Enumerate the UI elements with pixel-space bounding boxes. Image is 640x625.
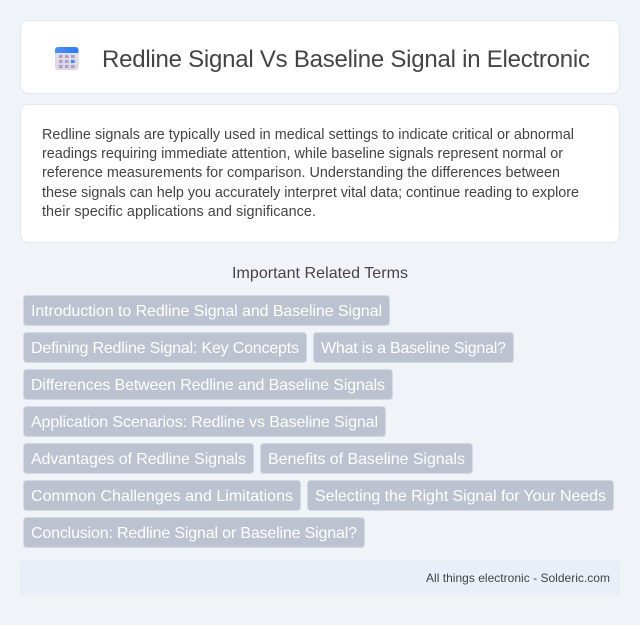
tag: [24, 296, 390, 326]
tag: [308, 480, 614, 510]
tag: [24, 406, 386, 436]
intro text: these signals can help you accurately interpret vital data; continue reading to explore: [42, 185, 579, 201]
tag: [24, 370, 392, 400]
intro text: readings requiring immediate attention, while baseline signals represent normal or: [42, 146, 563, 162]
tag: [24, 332, 306, 362]
intro text: Redline signals are typically used in medical settings to indicate critical or abnormal: [42, 127, 574, 143]
tag: Introduction to Redline Signal and Baseline Signal: [31, 303, 382, 320]
tag: [260, 444, 472, 474]
title: Redline Signal Vs Baseline Signal in Electronic: [102, 46, 590, 73]
panel: intro description: [20, 104, 620, 242]
tag: Selecting the Right Signal for Your Needs: [315, 488, 606, 505]
tag: [314, 332, 514, 362]
tag: [24, 480, 300, 510]
icon: calendar: [55, 47, 78, 70]
tag: Common Challenges and Limitations: [31, 488, 293, 505]
tag: Differences Between Redline and Baseline Signals: [31, 377, 385, 394]
intro text: their specific applications and significance.: [42, 204, 316, 220]
tag: Application Scenarios: Redline vs Baseline Signal: [31, 414, 378, 431]
footer bar: [20, 561, 620, 595]
tag list: [24, 296, 614, 548]
tag: Advantages of Redline Signals: [31, 451, 246, 468]
intro text: reference measurements for comparison. Understanding the differences between: [42, 165, 560, 181]
tag: [24, 444, 254, 474]
header panel: [20, 20, 620, 94]
tag: Defining Redline Signal: Key Concepts: [31, 340, 299, 357]
tag: Conclusion: Redline Signal or Baseline Signal?: [31, 525, 357, 542]
heading: important related terms: Important Related Terms: [232, 265, 408, 282]
footer text: All things electronic - Solderic.com: [426, 571, 610, 585]
tag: Benefits of Baseline Signals: [268, 451, 465, 468]
intro text: [42, 127, 579, 220]
tag: [24, 518, 364, 548]
tag: What is a Baseline Signal?: [321, 340, 506, 357]
